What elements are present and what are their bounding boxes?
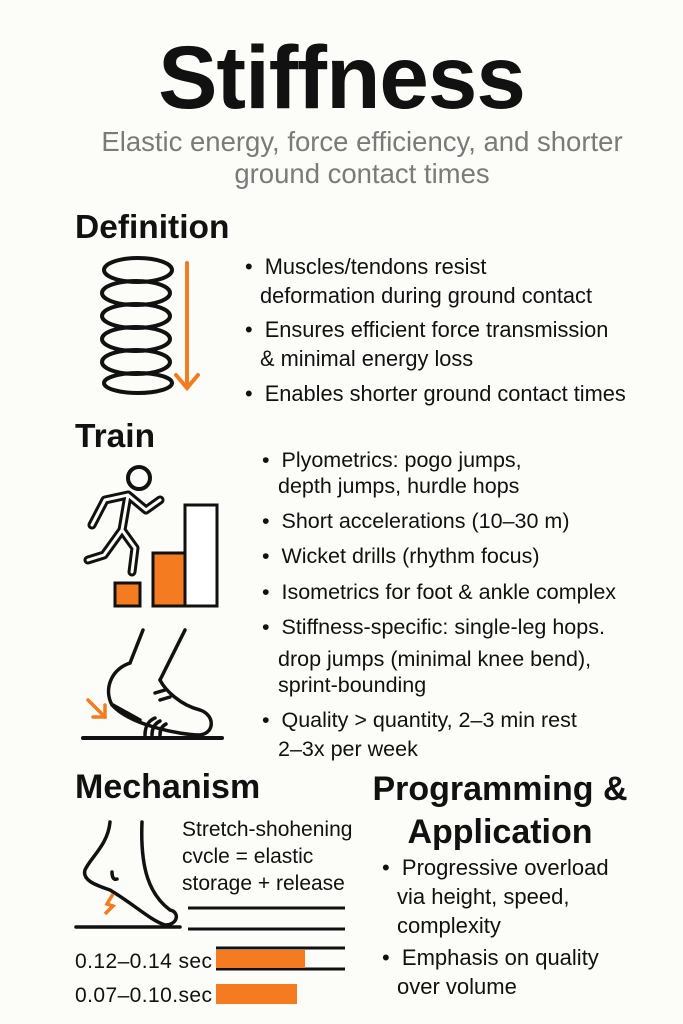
icon: shoe striking ground: [81, 628, 224, 740]
text: • Isometrics for foot & ankle complex: [262, 580, 616, 604]
train bullets: [262, 448, 616, 761]
text: over volume: [397, 974, 517, 999]
heading: programming & application: Programming &: [372, 770, 628, 808]
text: • Plyometrics: pogo jumps,: [262, 448, 522, 472]
text: sprint-bounding: [278, 673, 426, 697]
mechanism text: [182, 818, 352, 895]
programming bullets: [382, 855, 609, 999]
mechanism text: Stretch-shohening: [182, 818, 352, 841]
heading: mechanism: Mechanism: [75, 768, 260, 806]
subtitle: Elastic energy, force efficiency, and shorter: [101, 126, 623, 157]
mechanism text: cvcle = elastic: [182, 845, 313, 868]
text: • Enables shorter ground contact times: [245, 381, 626, 406]
mechanism text: storage + release: [182, 872, 345, 895]
text: • Short accelerations (10–30 m): [262, 509, 569, 533]
text: & minimal energy loss: [260, 346, 473, 371]
text: complexity: [397, 913, 501, 938]
bar chart: contact times: [75, 906, 345, 1007]
subtitle: ground contact times: [234, 158, 490, 189]
text: • Progressive overload: [382, 855, 609, 880]
text: • Stiffness-specific: single-leg hops.: [262, 615, 605, 639]
subtitle: [101, 126, 623, 189]
text: 2–3x per week: [278, 737, 418, 761]
icon: spring with arrow: [100, 256, 200, 395]
text: deformation during ground contact: [260, 283, 592, 308]
text: • Ensures efficient force transmission: [245, 317, 608, 342]
icon: runner on steps: [84, 465, 218, 608]
text: via height, speed,: [397, 884, 569, 909]
bar chart: contact times: 0.12–0.14 sec: [75, 950, 212, 973]
text: depth jumps, hurdle hops: [278, 474, 519, 498]
heading: train: Train: [75, 418, 155, 455]
text: • Wicket drills (rhythm focus): [262, 544, 540, 568]
bar chart: contact times: 0.07–0.10.sec: [75, 984, 212, 1007]
heading: programming & application: [372, 770, 628, 851]
text: • Quality > quantity, 2–3 min rest: [262, 708, 577, 732]
text: • Muscles/tendons resist: [245, 254, 486, 279]
title: Stiffness: [158, 27, 525, 127]
icon: foot: [74, 820, 182, 929]
text: • Emphasis on quality: [382, 945, 599, 970]
definition bullets: [245, 254, 626, 406]
heading: definition: Definition: [75, 209, 229, 246]
text: drop jumps (minimal knee bend),: [278, 647, 591, 671]
heading: programming & application: Application: [407, 813, 593, 851]
